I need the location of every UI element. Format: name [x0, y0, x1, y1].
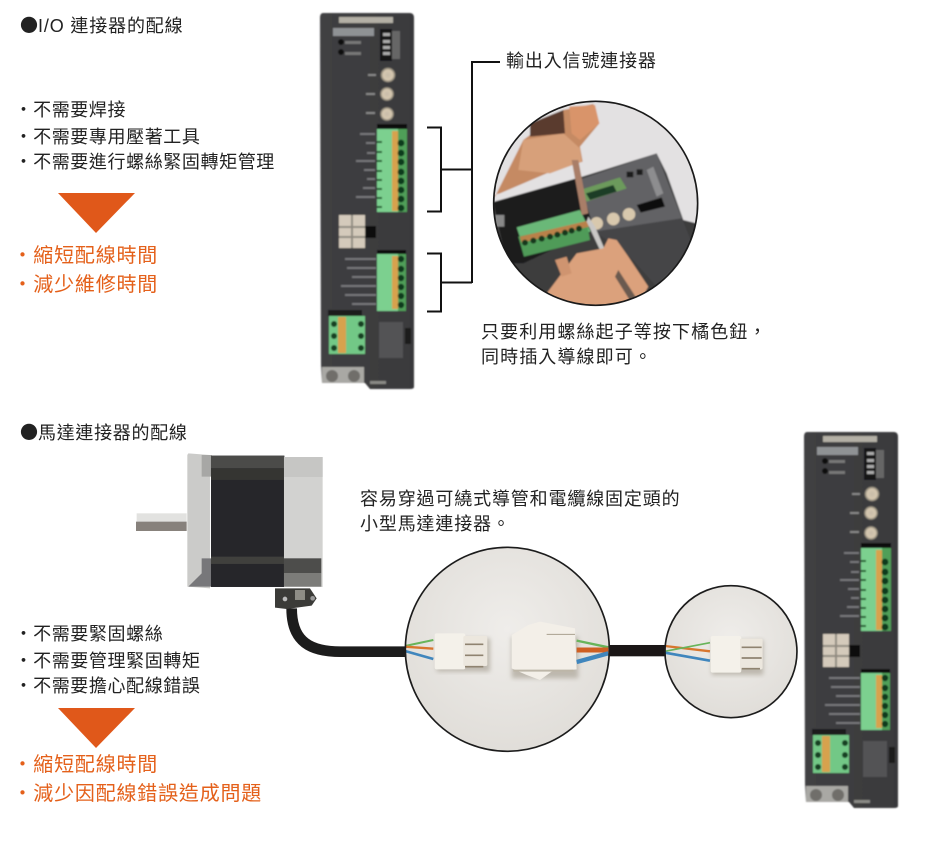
list: I/O connector benefits: ・不需要專用壓著工具: [14, 127, 200, 147]
bracket connector lines: [427, 62, 500, 312]
text: press button instruction: 只要利用螺絲起子等按下橘色鈕，: [481, 322, 768, 342]
text: small motor connector note: 容易穿過可繞式導管和電纜線固定頭的: [360, 489, 680, 509]
arrow: result triangle 1: [58, 193, 135, 233]
arrow: result triangle 2: [58, 708, 135, 748]
image: driver unit bottom: [804, 432, 898, 808]
image: driver unit top: [320, 13, 414, 389]
text: press button instruction: [481, 322, 768, 367]
list: I/O connector benefits: ・不需要進行螺絲緊固轉矩管理: [14, 152, 275, 172]
list: I/O results in orange: ・減少維修時間: [12, 273, 158, 296]
list: motor connector benefits: ・不需要緊固螺絲: [14, 624, 163, 644]
list: motor connector benefits: ・不需要擔心配線錯誤: [14, 676, 200, 696]
photo: screwdriver inserting wire: [492, 100, 698, 306]
text: small motor connector note: 小型馬達連接器。: [360, 514, 511, 534]
list: motor connector benefits: ・不需要管理緊固轉矩: [14, 651, 200, 671]
list: I/O results in orange: [12, 244, 158, 296]
heading: motor connector wiring: ●馬達連接器的配線: [20, 419, 188, 445]
text: small motor connector note: [360, 489, 680, 534]
image: stepper motor with cable: [136, 453, 405, 652]
list: I/O connector benefits: ・不需要焊接: [14, 100, 126, 120]
close-up: mating connectors: [405, 547, 609, 751]
heading: I/O connector wiring: ●I/O 連接器的配線: [20, 12, 184, 38]
text: press button instruction: 同時插入導線即可。: [481, 347, 653, 367]
list: I/O connector benefits: [14, 100, 275, 172]
label: output signal connector: 輸出入信號連接器: [506, 51, 657, 71]
list: motor connector benefits: [14, 624, 200, 696]
list: motor results in orange: [12, 753, 262, 805]
close-up: single connector: [665, 586, 797, 718]
image: connector close-up circles and cable: [405, 547, 797, 751]
list: motor results in orange: ・縮短配線時間: [12, 753, 158, 776]
list: motor results in orange: ・減少因配線錯誤造成問題: [12, 782, 262, 805]
list: I/O results in orange: ・縮短配線時間: [12, 244, 158, 267]
